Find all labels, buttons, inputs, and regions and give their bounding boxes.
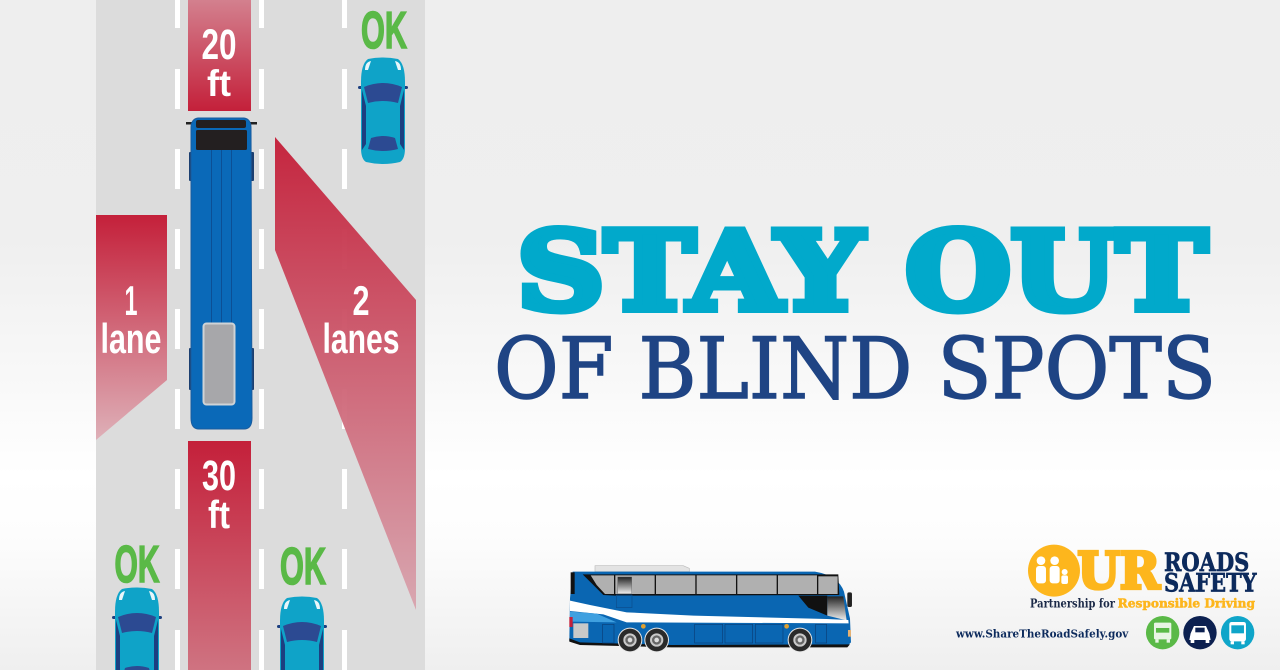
bus top view xyxy=(186,118,257,429)
car OK top right xyxy=(358,2,408,164)
logo: Our Roads Safety xyxy=(955,541,1257,649)
logo: Our Roads Safety: Responsible Driving xyxy=(1118,596,1256,610)
blind spot: left 1 lane xyxy=(96,215,167,440)
logo: Our Roads Safety: ROADS xyxy=(1164,547,1249,577)
blind spot: rear 30 ft xyxy=(188,441,251,670)
logo: Our Roads Safety: UR xyxy=(1077,541,1161,601)
logo: Our Roads Safety: www.ShareTheRoadSafely.gov xyxy=(955,627,1129,640)
blind spot: rear 30 ft: ft xyxy=(208,494,230,537)
blind spot: rear 30 ft: 30 xyxy=(202,452,236,500)
side view coach xyxy=(569,566,852,652)
icon: truck xyxy=(1146,616,1179,649)
icon: bus xyxy=(1221,616,1254,649)
logo family icon xyxy=(1036,556,1068,584)
car OK top right: OK xyxy=(361,2,407,60)
blind spot: left 1 lane: lane xyxy=(100,315,162,362)
blind spot: front 20 ft xyxy=(188,0,251,111)
blind spot: right 2 lanes xyxy=(275,137,416,610)
road xyxy=(96,0,425,670)
logo: Our Roads Safety: SAFETY xyxy=(1164,568,1257,598)
title: stay out: STAY OUT xyxy=(517,209,1207,335)
car OK bottom left: OK xyxy=(114,536,160,594)
blind spot: front 20 ft: ft xyxy=(207,63,231,104)
car OK bottom right: OK xyxy=(280,538,326,596)
title: of blind spots: OF BLIND SPOTS xyxy=(494,320,1216,418)
blind spot: left 1 lane: 1 xyxy=(124,277,138,324)
blind spot: right 2 lanes: 2 xyxy=(352,277,370,324)
logo: Our Roads Safety: Partnership for xyxy=(1030,596,1116,610)
icon: car xyxy=(1183,616,1217,649)
car OK bottom right xyxy=(277,538,327,670)
car OK bottom left xyxy=(112,536,162,670)
blind spot: right 2 lanes: lanes xyxy=(322,315,400,362)
blind spot: front 20 ft: 20 xyxy=(202,21,236,69)
